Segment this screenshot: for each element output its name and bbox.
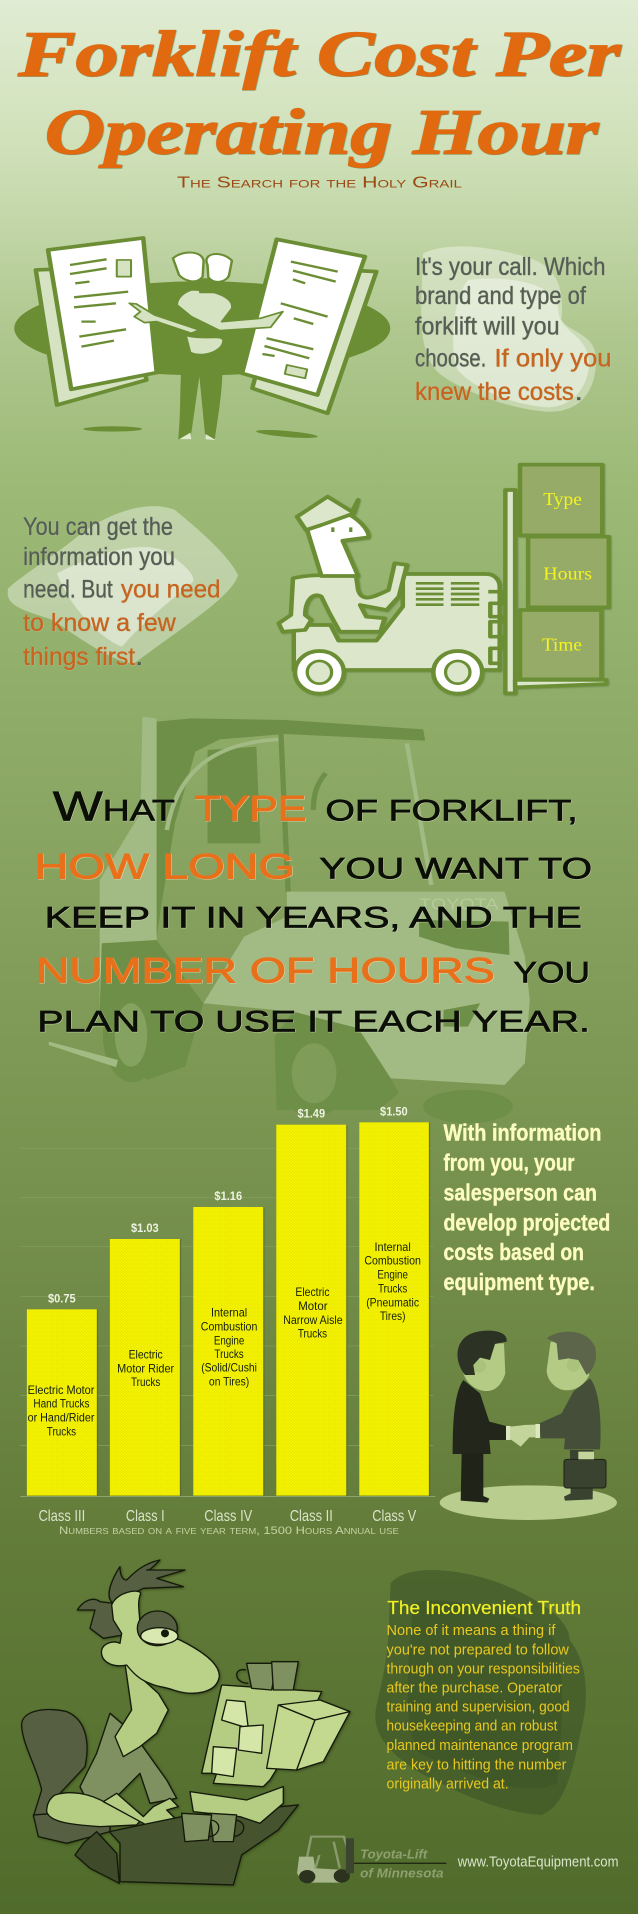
desk mugs <box>182 1813 244 1842</box>
class labels: Class II <box>290 1508 333 1525</box>
bars <box>27 1122 429 1496</box>
sticky notes <box>212 1700 263 1777</box>
class labels: Class V <box>372 1508 417 1525</box>
value labels: $1.03 <box>131 1221 159 1235</box>
question text: PLAN TO USE IT EACH YEAR. <box>37 1005 590 1038</box>
bar descriptions: or Hand/Rider <box>28 1411 95 1424</box>
truth text: after the purchase. Operator <box>387 1679 563 1696</box>
text block: information: need. But <box>23 575 113 603</box>
figure <box>129 253 283 440</box>
bar descriptions: Hand Trucks <box>33 1397 90 1410</box>
text block: your call <box>415 253 612 405</box>
bar descriptions <box>28 1240 421 1438</box>
truth text: originally arrived at. <box>387 1775 509 1792</box>
chart footnote: Numbers based on a five year term, 1500 Hours Annual use <box>59 1524 399 1537</box>
right document <box>242 239 376 413</box>
question text: KEEP IT IN YEARS, AND THE <box>45 900 582 934</box>
cargo: type <box>520 465 602 535</box>
bar descriptions: Tires) <box>380 1309 405 1323</box>
keyboard <box>190 1787 283 1823</box>
text block: your call: knew the costs <box>415 378 574 405</box>
class labels: Class IV <box>204 1508 253 1525</box>
bar descriptions: Narrow Aisle <box>283 1313 343 1327</box>
question text: NUMBER OF HOURS <box>36 951 495 991</box>
leg <box>47 1793 143 1827</box>
green ellipse backdrop <box>14 281 390 375</box>
bar descriptions: Trucks <box>131 1375 161 1389</box>
ground shadows <box>83 426 318 440</box>
neck and collar <box>115 1663 168 1757</box>
bar descriptions: Trucks <box>298 1327 328 1340</box>
dealer logo: of Minnesota <box>360 1866 444 1880</box>
class labels: Class I <box>126 1508 165 1525</box>
bar descriptions: on Tires) <box>209 1375 249 1388</box>
value labels: $1.49 <box>297 1107 325 1120</box>
top mugs <box>237 1662 298 1690</box>
illustration: forklift with driver <box>279 465 609 694</box>
header <box>14 17 621 440</box>
title <box>17 17 621 168</box>
question text: HOW LONG <box>35 847 295 886</box>
section: inconvenient truth <box>297 1570 618 1883</box>
truth text: you're not prepared to follow <box>387 1641 570 1658</box>
truth text: through on your responsibilities <box>387 1660 580 1677</box>
cargo: time <box>520 610 601 679</box>
truth text <box>387 1598 581 1792</box>
dealer logo <box>297 1837 446 1883</box>
class labels <box>38 1508 417 1525</box>
salesperson text <box>444 1119 610 1295</box>
bar descriptions: Trucks <box>214 1347 244 1361</box>
text block: your call: If only you <box>494 344 612 372</box>
title: Operating Hour <box>45 95 599 168</box>
text block: information: things first <box>23 643 135 670</box>
foot <box>75 1832 119 1883</box>
wheels <box>295 651 482 694</box>
text block: information: You can get the <box>23 513 173 540</box>
hair <box>77 1560 185 1638</box>
bar descriptions: Motor Rider <box>117 1362 175 1375</box>
section: the question <box>35 717 592 1123</box>
title: Forklift Cost Per <box>17 17 621 90</box>
text block: information: you need <box>121 575 221 603</box>
head <box>101 1591 219 1693</box>
blob behind text <box>421 246 596 412</box>
cargo: type: Type <box>543 490 582 509</box>
ghost forklift photo: TOYOTA <box>419 896 499 913</box>
bar descriptions: (Solid/Cushi <box>201 1361 257 1374</box>
seat <box>33 1813 110 1843</box>
truth text: The Inconvenient Truth <box>387 1598 581 1618</box>
bar descriptions: Engine <box>377 1268 408 1281</box>
truth text: training and supervision, good <box>387 1698 570 1715</box>
bar descriptions: Electric <box>295 1285 330 1299</box>
bar chart <box>20 1105 435 1525</box>
grille teeth <box>488 592 501 663</box>
cargo: hours <box>528 537 609 607</box>
man right <box>523 1332 606 1501</box>
bar descriptions: Motor <box>298 1299 328 1313</box>
question text: YOU <box>514 956 590 989</box>
dark blob <box>375 1570 586 1815</box>
truth text: are key to hitting the number <box>387 1756 567 1773</box>
desk <box>109 1805 298 1885</box>
mast <box>505 490 606 693</box>
text block: your call: . <box>575 378 583 405</box>
torso <box>80 1713 177 1807</box>
bar descriptions: Electric <box>129 1348 163 1361</box>
text block: your call: forklift will you <box>415 312 559 340</box>
class labels: Class III <box>38 1508 85 1525</box>
truth text: None of it means a thing if <box>387 1622 556 1639</box>
question text: OF FORKLIFT, <box>326 794 578 827</box>
truth text: housekeeping and an robust <box>387 1717 558 1734</box>
blob behind text <box>8 506 238 663</box>
computer tower <box>202 1685 322 1787</box>
cargo: time: Time <box>542 635 582 655</box>
section: forklift and driver <box>8 465 609 694</box>
question text <box>35 783 592 1038</box>
illustration: handshake <box>440 1331 617 1520</box>
bar descriptions: (Pneumatic <box>366 1296 420 1309</box>
ghost forklift photo <box>49 717 530 1123</box>
left document <box>36 238 157 405</box>
driver <box>279 497 407 632</box>
bar descriptions: Trucks <box>47 1425 76 1438</box>
bar descriptions: Combustion <box>364 1254 421 1267</box>
value labels: $1.50 <box>380 1105 408 1118</box>
illustration: tired man at computer <box>22 1560 350 1885</box>
dealer logo: Toyota-Lift <box>360 1847 428 1861</box>
bar descriptions: Combustion <box>201 1320 257 1333</box>
cargo: hours: Hours <box>543 564 592 584</box>
value labels <box>48 1105 408 1305</box>
man left <box>453 1331 532 1503</box>
value labels: $1.16 <box>214 1189 242 1203</box>
question text: What <box>53 783 175 830</box>
text block: information: to know a few <box>23 609 176 636</box>
text block: information: . <box>135 643 143 670</box>
question text: YOU WANT TO <box>319 851 592 885</box>
vents <box>416 583 479 605</box>
question text: TYPE <box>194 789 306 829</box>
bar descriptions: Internal <box>375 1240 411 1254</box>
illustration: two-headed man comparing documents <box>14 238 390 440</box>
bar descriptions: Electric Motor <box>28 1383 95 1397</box>
value labels: $0.75 <box>48 1292 76 1305</box>
text block: information: information you <box>23 543 175 570</box>
hands and sleeves <box>103 1793 178 1832</box>
bar descriptions: Trucks <box>378 1282 408 1295</box>
truck body <box>294 574 500 670</box>
tired eye <box>137 1611 178 1646</box>
subtitle: The Search for the Holy Grail <box>177 174 462 191</box>
text block: information <box>23 513 221 670</box>
monitor <box>267 1700 350 1770</box>
ground ellipse <box>440 1485 617 1520</box>
text block: your call: choose. <box>415 344 486 372</box>
truth text: planned maintenance program <box>387 1737 573 1754</box>
chair <box>22 1710 87 1817</box>
bar descriptions: Engine <box>214 1334 244 1347</box>
section: cost chart <box>20 1105 610 1537</box>
salesperson text: from you, your <box>444 1149 575 1176</box>
bar descriptions: Internal <box>211 1306 247 1319</box>
